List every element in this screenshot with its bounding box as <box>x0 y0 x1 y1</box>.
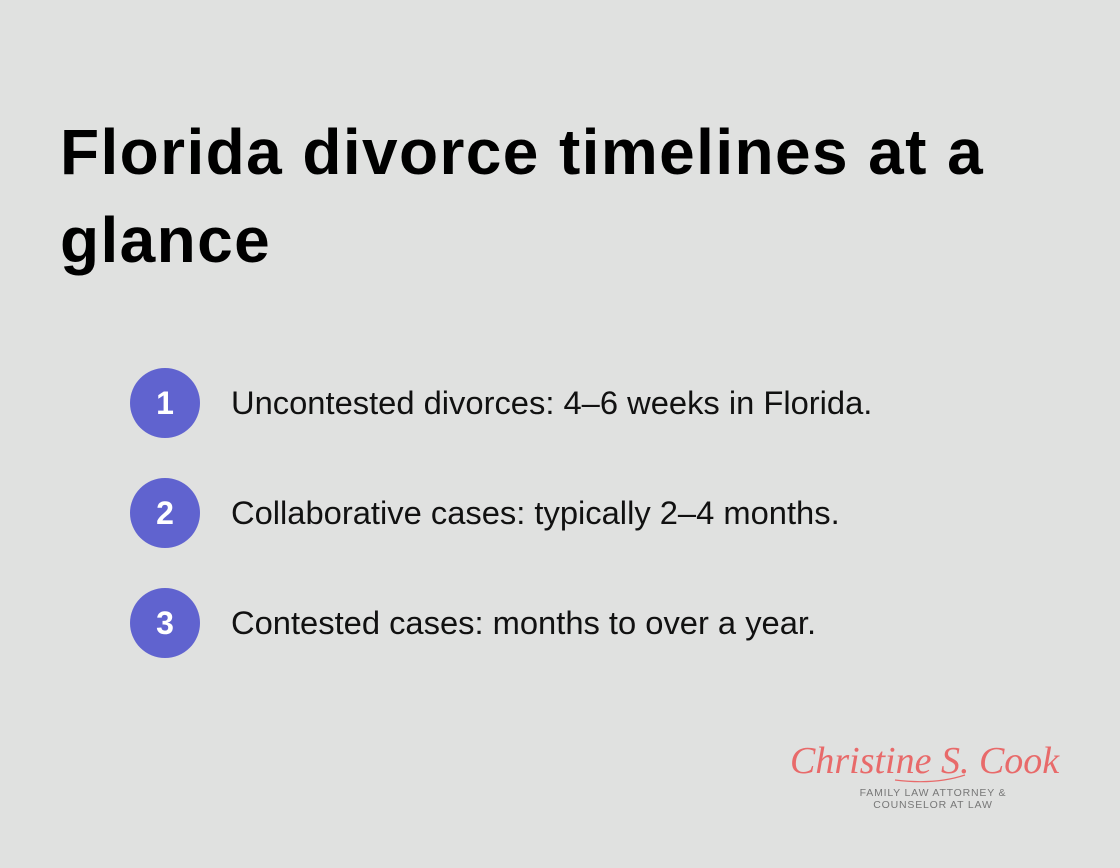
badge 2: 2 <box>156 495 174 531</box>
item 2 <box>130 478 840 548</box>
badge 1 <box>130 368 200 438</box>
title: Florida divorce timelines at a glance <box>60 116 984 276</box>
text 3: Contested cases: months to over a year. <box>231 604 816 641</box>
badge 3 <box>130 588 200 658</box>
logo: FAMILY LAW ATTORNEY & <box>860 787 1006 799</box>
badge 2 <box>130 478 200 548</box>
item 3 <box>130 588 816 658</box>
badge 1: 1 <box>156 385 174 421</box>
logo <box>790 740 1060 811</box>
text 2: Collaborative cases: typically 2–4 months. <box>231 494 840 531</box>
badge 3: 3 <box>156 605 174 641</box>
text 1: Uncontested divorces: 4–6 weeks in Florida. <box>231 384 872 421</box>
logo: Christine S. Cook <box>790 740 1060 782</box>
item 1 <box>130 368 872 438</box>
logo: COUNSELOR AT LAW <box>873 799 993 811</box>
